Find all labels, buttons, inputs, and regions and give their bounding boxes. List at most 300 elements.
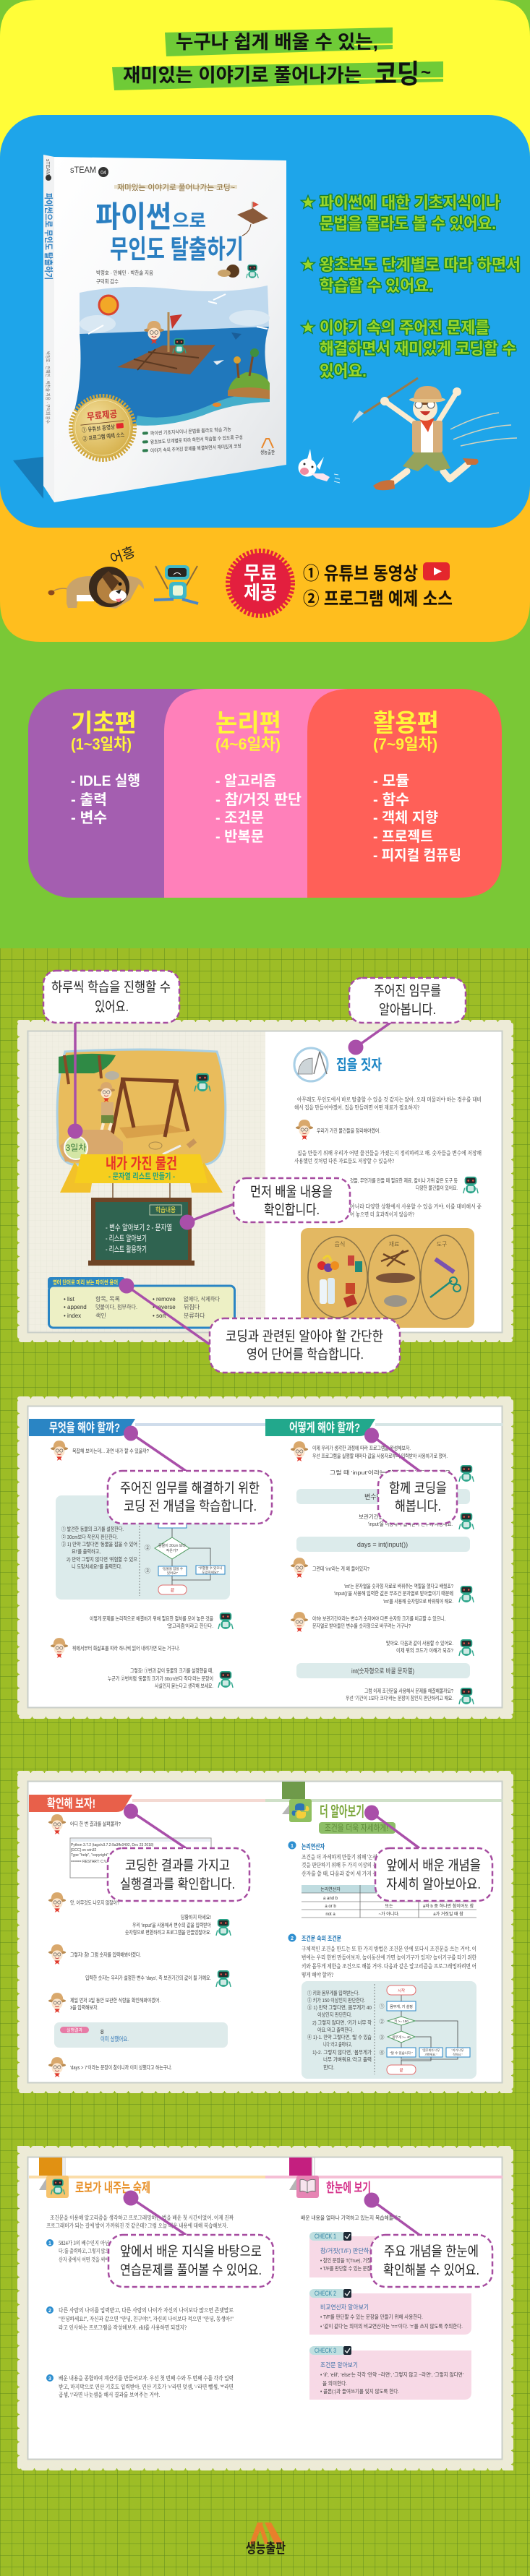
cover bullets — [142, 426, 243, 455]
nested conditions section: 2 — [291, 1936, 294, 1941]
cover illustration: sea and raft — [74, 285, 270, 426]
heading: at a glance: 한눈에 보기 — [326, 2181, 371, 2195]
homework text: 조건문을 이용해 알고리즘을 생각하고 프로그래밍하는 법을 배운 첫 시간이었어. 이제 진짜 — [50, 2214, 234, 2221]
flowchart panel: ③ — [379, 2035, 385, 2040]
flowchart panel: ① 발견한 동물의 크기를 설정한다. — [61, 1525, 124, 1532]
check card 1: • 참인 문장을 T(True), 거짓 — [320, 2257, 371, 2264]
callout: mission: 알아봅니다. — [379, 1002, 436, 1018]
illustration: item classification: 음식 — [335, 1241, 345, 1248]
flowchart panel: 한다. — [323, 2064, 335, 2071]
right dialog: int(숫자형으로 바꿀 문자열) — [351, 1667, 414, 1675]
nested conditions section — [288, 1934, 476, 2079]
check card 3: 을 의미한다. — [322, 2379, 347, 2387]
feature 1: 문법을 몰라도 볼 수 있어요. — [320, 215, 496, 233]
icon: python logo — [292, 1803, 309, 1819]
callout: concepts before coding: 코딩 전 개념을 학습합니다. — [124, 1498, 257, 1514]
callout: code together — [364, 1428, 457, 1524]
steam logo: sTEAM — [70, 165, 96, 175]
operators table: a and b — [323, 1897, 338, 1901]
flowchart panel: ② 30cm보다 작은지 판단한다. — [61, 1533, 118, 1540]
exercise 1 — [46, 2239, 109, 2263]
right dialog: 이제 우리가 생각한 과정에 따라 프로그램을 완성해보자. — [312, 1444, 411, 1451]
flowchart panel: 2) 만약 그렇지 않다면 '위험할 수 있으 — [67, 1555, 137, 1563]
callout: concepts in detail: 자세히 알아보아요. — [386, 1876, 481, 1892]
chalkboard: - 변수 알아보기 2 - 문자열 — [106, 1222, 172, 1232]
feature 2: 왕초보도 단계별로 따라 하면서 — [320, 256, 521, 274]
right dialog: 우선 '기간이 1보다 크다'라는 문장이 참인지 판단하려고 해요. — [346, 1694, 453, 1701]
logical operators section: 산자를 쓸 때, 다음과 같이 세 가지 중 — [302, 1870, 377, 1877]
left dialog: 숫자형으로 변환하려고 프로그램을 만들었잖아요. — [125, 1928, 211, 1936]
character: running explorer — [352, 378, 517, 490]
column: logic — [164, 689, 347, 898]
callout: english words: 코딩과 관련된 알아야 할 간단한 — [226, 1328, 383, 1344]
flowchart panel: ③ — [145, 1568, 150, 1574]
feature 2: 학습할 수 있어요. — [320, 277, 433, 295]
check card 3: • 콜론(:)과 들여쓰기를 잊지 않도록 한다. — [320, 2387, 399, 2395]
illustration: item classification: 도구 — [437, 1241, 447, 1248]
text: example source: ② 프로그램 예제 소스 — [303, 589, 453, 609]
feature list — [301, 194, 521, 380]
callout: english words — [119, 1278, 400, 1373]
body text: 해서 집을 만들어야겠어. 집을 만들려면 어떤 재료가 필요하지? — [294, 1104, 419, 1111]
homework text — [46, 2214, 234, 2398]
exercise 3: 곱셈, '/'라면 나눗셈을 해서 결과를 보여주는 거야. — [59, 2391, 160, 2398]
right dialog: 'int'를 사용해 숫자형으로 바꿔줘야 해요. — [383, 1597, 453, 1605]
logical operators section: 것을 판단하기 위해 두 가지 이상의 문 — [302, 1861, 377, 1868]
gold seal: ① 유튜브 동영상 — [82, 423, 116, 434]
right dialog: 'input'을 이용해서 입력받아 변수에 저장해요. — [368, 1520, 453, 1527]
cover bullets: 이야기 속의 주어진 문제를 해결하면서 재미있게 코딩 — [150, 442, 242, 454]
flowchart panel: ③ 1) 만약 그렇다면, 몸무게가 40 — [307, 2004, 372, 2011]
column: applied: - 모듈 — [373, 773, 409, 789]
icon: open book — [300, 2179, 315, 2193]
exercise 3: 3 — [48, 2377, 51, 2382]
illustration: item classification — [301, 1228, 474, 1328]
callout: practice problems: 앞에서 배운 지식을 바탕으로 — [120, 2244, 262, 2259]
right dialog: days = int(input()) — [357, 1541, 408, 1548]
flowchart panel: ③ 1) 만약 그렇다면 '동물을 잡을 수 있어 — [61, 1540, 137, 1547]
body text: 어 놓으면 더 효과적이지 않을까? — [350, 1211, 414, 1218]
left dialog lower: 그렇죠! ①번과 같이 동물의 크기를 설정했을 때, — [130, 1667, 213, 1674]
body text: 아니라 다양한 상황에서 사용할 수 있을 거야. 이를 대비해서 종 — [350, 1203, 482, 1210]
badge: day 3 — [64, 1136, 87, 1159]
flowchart panel: "위험할 수 있으니 — [198, 1566, 223, 1571]
chalkboard: 학습내용 — [155, 1206, 176, 1214]
right dialog: 이제 위의 코드가 이해가 되죠? — [396, 1647, 453, 1654]
flowchart panel: 동물이 30cm 보다 — [158, 1543, 186, 1548]
publisher mark on cover — [260, 439, 275, 455]
right dialog: 아하! 보관기간이라는 변수가 숫자여야 다른 숫자와 크기를 비교할 수 있으니, — [312, 1615, 445, 1622]
column: applied: - 피지컬 컴퓨팅 — [373, 847, 461, 864]
exercise 1: 다.'를 출력하고, 그렇지 않으 — [59, 2247, 109, 2254]
flowchart panel: 가벼워요." — [424, 2052, 437, 2056]
column: basics: - 출력 — [71, 791, 107, 808]
flowchart panel: 요!'를 출력하고, — [72, 1547, 101, 1555]
right dialog: 그럴 때 'input'이라는 명령어를 사용하면 돼요. — [330, 1469, 453, 1476]
headline line 2: 코딩 — [375, 59, 419, 89]
body text: 아무래도 무인도에서 바로 탈출할 수 있을 것 같지는 않아. 오래 머물러야 하는 경우를 대비 — [297, 1096, 482, 1103]
column: applied: - 객체 지향 — [373, 810, 438, 826]
callout: concepts in detail: 앞에서 배운 개념을 — [386, 1858, 481, 1873]
column: logic: (4~6일차) — [215, 735, 281, 753]
left dialog: 제일 먼저 3일 동안 보관한 식량을 확인해봐야겠어. — [70, 1996, 161, 2004]
mini characters — [218, 265, 258, 278]
right dialog: 그런데 'int'라는 게 왜 들어있지? — [312, 1565, 369, 1572]
flowchart panel: ② — [379, 2019, 385, 2025]
check card 1: CHECK 1 — [315, 2233, 336, 2240]
heading: learn more: 더 알아보기 — [320, 1803, 364, 1820]
body text: 사용했던 것처럼 다른 자료들도 저장할 수 있을까? — [294, 1157, 394, 1164]
callout: concepts before coding — [108, 1425, 272, 1524]
right dialog: 보관기간을 — [359, 1513, 384, 1520]
check card 2: • '같이 같다'는 의미의 비교연산자는 '=='이다. '='를 쓰지 않도록 주의한다. — [320, 2322, 463, 2330]
left dialog: 앗, 아무것도 나오지 않잖아? — [70, 1899, 119, 1906]
cover tagline: 재미있는 이야기로 풀어나가는 코딩~ — [117, 183, 235, 192]
right dialog: 우선 프로그램을 실행할 때마다 값을 사용자로부터 입력받아 사용하기로 했어. — [312, 1452, 448, 1459]
vocabulary box: • append — [64, 1304, 87, 1310]
left dialog: 어디 한 번 결과를 살펴볼까? — [70, 1820, 121, 1827]
flowchart panel: ② — [145, 1545, 150, 1551]
column: basics: (1~3일차) — [71, 735, 132, 753]
page title: 집을 짓자 — [336, 1057, 382, 1073]
heading: what to do: 무엇을 해야 할까? — [49, 1421, 120, 1435]
logo: publisher: 생능출판 — [246, 2541, 286, 2556]
callout: what you'll learn: 먼저 배울 내용을 — [250, 1184, 333, 1200]
operators table: a가 거짓일 때 참 — [433, 1911, 463, 1917]
spine text — [43, 159, 54, 424]
exercise 3: 배운 내용을 종합하여 계산기를 만들어보자. 우선 첫 번째 수와 두 번째 수를 각각 입력 — [59, 2374, 234, 2382]
icon: lion — [48, 544, 144, 609]
heading: what to do — [29, 1419, 265, 1436]
background: graph paper section — [0, 948, 530, 2576]
heading: robot homework — [29, 2158, 265, 2198]
spine text: 파이썬으로 무인도 탈출하기 — [43, 193, 54, 280]
exercise 2: "안녕하세요!", 자신과 같으면 "안녕, 친구야!", 자신의 나이보다 적으면 "안녕, 동생아!" — [59, 2315, 234, 2322]
exercise 3 — [46, 2374, 234, 2398]
body text: 것들, 무언가를 만들 때 필요한 재료, 칼이나 가위 같은 도구 등 — [350, 1177, 458, 1184]
callout: practice problems: 연습문제를 풀어볼 수 있어요. — [120, 2262, 262, 2278]
exercise 2: 2 — [48, 2309, 51, 2314]
text: roar: 어흥 — [108, 544, 137, 567]
check card 2 — [309, 2289, 471, 2335]
panel: blue book hero — [0, 115, 530, 528]
exercise 2: 다른 사람의 나이를 입력받고, 다른 사람의 나이가 자신의 나이보다 많으면 존댓말로 — [59, 2306, 234, 2314]
body text — [294, 1096, 482, 1218]
nested conditions section: 떻게 해야 할까? — [302, 1971, 333, 1978]
nested conditions section: 구체적인 조건을 만드는 또 한 가지 방법은 조건문 안에 또다시 조건문을 쓰는 거야. 이 — [302, 1945, 476, 1952]
headline line 2 — [112, 59, 443, 90]
vocabulary box: • remove — [153, 1296, 176, 1302]
operators table: 또는 — [385, 1904, 393, 1909]
callout: concepts before coding: 주어진 임무를 해결하기 위한 — [120, 1480, 260, 1496]
cover title: 파이썬 — [95, 200, 171, 233]
badge: day 3: 3일차 — [66, 1143, 86, 1153]
heading: how to do: 어떻게 해야 할까? — [289, 1421, 360, 1435]
callout: learn daily: 하루씩 학습을 진행할 수 — [51, 979, 171, 995]
heading: learn more — [265, 1782, 503, 1834]
flowchart panel: 끝 — [171, 1588, 175, 1593]
operators table: a와 b 중 하나만 참이어도 참 — [423, 1903, 474, 1909]
flowchart panel: ② 키가 150 이상인지 판단한다. — [307, 1996, 365, 2004]
check card 1 — [309, 2232, 471, 2277]
heading: check result — [29, 1795, 265, 1812]
left dialog: [GCC] on win32 — [71, 1848, 97, 1852]
vocabulary box: 덧붙이다, 첨부하다. — [95, 1303, 137, 1310]
callout: learn daily — [43, 971, 179, 1139]
cover title: 무인도 탈출하기 — [110, 234, 244, 264]
body text: 우리가 가진 물건들을 정리해야겠어. — [317, 1127, 380, 1134]
icon: compass and protractor — [294, 1048, 328, 1081]
cover title: 으로 — [172, 211, 206, 231]
spine text: 박정호 · 안혜민 · 박찬솔 지음 · 구덕회 감수 — [45, 351, 51, 424]
callout: practice problems — [108, 2190, 273, 2287]
heading: check result: 확인해 보자! — [47, 1797, 95, 1811]
flowchart panel: "탈 수 있습니다." — [390, 2051, 413, 2056]
callout: key concepts — [364, 2193, 492, 2287]
exercise 2: 라고 인사하는 프로그램을 작성해보자. elif를 사용하면 되겠지? — [59, 2324, 187, 2331]
vocabulary box: • reverse — [153, 1304, 176, 1310]
gold seal: ② 프로그램 예제 소스 — [82, 431, 125, 442]
callout: learn daily: 있어요. — [95, 999, 129, 1015]
left dialog: 8 — [101, 2029, 104, 2035]
right dialog: 그럼 이제 조건문을 사용해서 문제를 해결해볼까요? — [364, 1687, 453, 1694]
vocabulary box: 없애다, 삭제하다 — [184, 1295, 221, 1302]
exercise 1: 1 — [48, 2241, 51, 2246]
callout: concepts in detail — [364, 1806, 492, 1901]
operators table — [302, 1885, 476, 1918]
flowchart panel: 작아요." — [453, 2052, 463, 2056]
feature 3: 이야기 속의 주어진 문제를 — [320, 319, 490, 337]
body text: 다양한 물건들이 있어요. — [416, 1184, 458, 1191]
panel: page sample 4 — [20, 2148, 511, 2468]
callout: mission — [349, 978, 466, 1055]
cover title — [95, 200, 244, 264]
callout: key concepts: 확인해볼 수 있어요. — [383, 2262, 479, 2278]
flowchart panel: 2) 그렇지 않다면, '키가 너무 작 — [312, 2019, 372, 2026]
icon: youtube play — [423, 562, 450, 580]
text: youtube videos: ① 유튜브 동영상 — [303, 564, 418, 584]
left dialog top — [51, 1441, 149, 1461]
logical operators section: 논리연산자 — [302, 1842, 325, 1850]
panel: course parts — [28, 689, 502, 898]
left dialog lower: 이렇게 문제를 논리적으로 해결하기 위해 필요한 절차를 모아 놓은 것을 — [90, 1615, 213, 1622]
operators table: 논리연산자 — [320, 1886, 341, 1892]
left dialog: 우리 'input'을 사용해서 변수의 값을 입력받아 — [132, 1921, 211, 1928]
exercise 2 — [46, 2306, 234, 2331]
ribbon heading: - 문자열 리스트 만들기 - — [108, 1171, 175, 1181]
left dialog: 이미 상했어요. — [101, 2035, 129, 2043]
vocabulary box: 뒤집다 — [184, 1303, 200, 1310]
illustration: beach scene — [57, 1049, 226, 1164]
column: logic: - 알고리즘 — [215, 773, 276, 789]
column: applied: 활용편 — [373, 710, 439, 737]
flowchart panel: "동물을 잡을 수 — [162, 1566, 183, 1571]
heading: at a glance — [265, 2158, 503, 2198]
column: logic: - 참/거짓 판단 — [215, 791, 302, 808]
flowchart panel: ① 키와 몸무게를 입력받는다. — [307, 1989, 359, 1996]
left dialog: 실행결과 — [67, 2027, 83, 2033]
check card 3: • 'if', 'elif', 'else'는 각각 '만약 ~라면', '그렇지 않고 ~라면', '그렇지 않다면' — [320, 2371, 463, 2378]
flowchart panel: 몸무게, 키 설정 — [390, 2004, 413, 2009]
exercise 1: 5824가 3의 배수인지 아닌 — [59, 2239, 109, 2246]
flowchart panel: 니다.'라고 출력하고, — [323, 2040, 352, 2048]
logical operators section: 1 — [291, 1844, 294, 1849]
feature 3: 있어요. — [320, 362, 367, 380]
book: cover mockup — [13, 155, 286, 502]
left dialog: 당황하지 마세요! — [181, 1913, 211, 1920]
callout: check results: 코딩한 결과를 가지고 — [125, 1858, 230, 1873]
callout: what you'll learn — [179, 1178, 350, 1230]
vocabulary box: 색인 — [95, 1312, 106, 1319]
flowchart panel: 도망치세요!" — [202, 1570, 219, 1575]
badge: free offer: 무료 — [244, 562, 277, 584]
logo: publisher — [246, 2523, 286, 2556]
icon: robot waving — [154, 565, 198, 604]
feature 3: 해결하면서 재미있게 코딩할 수 — [320, 340, 516, 358]
body text: 집을 만들기 위해 우리가 어떤 물건들을 가졌는지 정리하려고 해. 숫자들을 변수에 저장해 — [297, 1149, 482, 1156]
cover bullets: 왕초보도 단계별로 따라 하면서 학습할 수 있도록 구성 — [150, 434, 243, 445]
callout: check results — [108, 1804, 249, 1901]
right dialog: 문자열로 받아들인 변수를 숫자형으로 바꾸려는 거구나? — [312, 1622, 411, 1629]
right dialog — [291, 1441, 474, 1704]
feature 1: 파이썬에 대한 기초지식이나 — [320, 194, 500, 212]
authors — [96, 269, 153, 285]
ribbon heading: 내가 가진 물건 — [106, 1156, 177, 1172]
column: applied — [307, 689, 502, 898]
mini raft — [237, 202, 268, 236]
left dialog lower — [51, 1613, 233, 1689]
operators table: a or b — [325, 1905, 336, 1909]
steam logo: 04 — [101, 171, 106, 176]
flowchart panel: 작은가? — [166, 1548, 179, 1553]
left dialog lower: 위에서부터 화살표를 따라 하나씩 읽어 내려가면 되는 거구나. — [72, 1644, 180, 1652]
authors: 구덕회 감수 — [96, 278, 119, 285]
flowchart panel: 너무 가벼워요.'라고 출력 — [323, 2056, 372, 2063]
panel: page sample 2 — [20, 1399, 511, 1717]
headline line 1 — [165, 27, 393, 56]
left dialog: 'days > 7'이라는 문장이 참이니까 이미 상했다고 하는구나. — [70, 2064, 172, 2071]
vocabulary box: 항목, 목록 — [95, 1296, 120, 1302]
flowchart panel: 몸무게 >= 40 — [392, 2035, 411, 2040]
left dialog: ===== RESTART: C:\Users ===== — [71, 1860, 127, 1864]
logical operators section: 조건을 더 자세하게 만들기 위해 '논리 — [302, 1853, 377, 1860]
left dialog: 그렇지! 참! 그럼 숫자를 입력해봐야겠다. — [70, 1951, 141, 1958]
character: rabbit — [298, 449, 340, 483]
column: applied: - 프로젝트 — [373, 828, 433, 845]
left dialog lower: '알고리즘'이라고 한단다. — [167, 1622, 213, 1629]
chalkboard: - 리스트 알아보기 — [106, 1233, 147, 1243]
spine text: sTEAM — [45, 159, 50, 176]
callout: code together: 해봅니다. — [395, 1498, 441, 1514]
vocabulary box: 분류하다 — [184, 1312, 205, 1319]
flowchart panel: 키 >= 150 — [394, 2019, 409, 2024]
flowchart panel: 니 도망치세요!'를 출력한다. — [72, 1563, 122, 1570]
heading: how to do — [265, 1419, 503, 1436]
chalkboard — [88, 1183, 195, 1266]
left dialog — [48, 1814, 231, 2077]
left dialog lower: 누군가 ②번처럼 '동물의 크기가 30cm보다 작다'라는 문장이 — [108, 1675, 213, 1682]
vocabulary box: • list — [64, 1296, 75, 1302]
flowchart panel: "키가 너무 — [451, 2048, 464, 2052]
headline line 1: 누구나 쉽게 배울 수 있는, — [176, 31, 378, 53]
flowchart panel — [56, 1495, 230, 1600]
flowchart panel: ④ 1)-1. 만약 그렇다면, '탈 수 있습 — [307, 2033, 372, 2040]
right dialog: 'int'는 문자열을 숫자형 자료로 바꿔주는 역할을 했다고 배웠죠? — [344, 1582, 453, 1589]
left dialog: Python 3.7.2 (tags/v3.7.2:9a3ffc0492, Dec 23 2018) — [71, 1843, 154, 1847]
check card 2: CHECK 2 — [315, 2290, 336, 2297]
flowchart panel: 1)-2. 그렇지 않다면, '몸무게가 — [312, 2048, 372, 2056]
check card 1: • T/F를 판단할 수 있는 문장 — [320, 2264, 371, 2272]
gold seal — [68, 393, 137, 463]
flowchart panel: 끝 — [399, 2068, 403, 2073]
flowchart panel: 아요.'라고 출력한다. — [317, 2026, 354, 2033]
authors: 박정호 · 안혜민 · 박찬솔 지음 — [96, 269, 153, 276]
panel: page sample 3 — [20, 1773, 511, 2091]
column: basics: - 변수 — [71, 810, 107, 826]
check card 1: 참/거짓(T/F) 판단하기 — [320, 2247, 375, 2254]
check card 3: 조건문 알아보기 — [320, 2361, 358, 2369]
vocabulary box — [48, 1277, 234, 1328]
headline line 2: ~ — [421, 63, 431, 82]
column: basics: 기초편 — [71, 710, 137, 737]
homework text: 프로그래머가 되는 길에 발이 가까워진 것 같은데? 그럼 오늘 배운 내용에 대해 복습해보자. — [46, 2222, 228, 2229]
flowchart panel: 이상인지 판단한다. — [317, 2011, 352, 2018]
panel: yellow header — [0, 0, 530, 361]
operators table: ~가 아니다. — [379, 1911, 400, 1917]
illustration: item classification: 재료 — [389, 1241, 399, 1248]
flowchart panel: 있어요!" — [167, 1571, 179, 1576]
nested conditions section: 번에는 우리 한번 만들어보자. 놀이동산에 가면 놀이기구가 있지? 놀이기구를 타기 위한 — [302, 1954, 476, 1961]
callout: mission: 주어진 임무를 — [374, 983, 441, 999]
column: logic: - 반복문 — [215, 828, 264, 845]
badge: free offer: 제공 — [244, 582, 277, 604]
right dialog: 변수명 = input() — [364, 1493, 409, 1500]
publisher mark on cover: 생능출판 — [260, 449, 275, 455]
check card 3: CHECK 3 — [315, 2347, 336, 2354]
steam logo — [70, 165, 108, 177]
callout: english words: 영어 단어를 학습합니다. — [247, 1347, 364, 1362]
check card 2: 비교연산자 알아보기 — [320, 2304, 369, 2311]
panel: page sample 1 — [20, 1022, 511, 1340]
flowchart panel: "몸무게가 너무 — [422, 2048, 440, 2052]
ribbon heading — [60, 1154, 223, 1193]
feature 1 — [301, 194, 500, 233]
callout: code together: 함께 코딩을 — [389, 1480, 447, 1496]
vocabulary box: 영어 단어로 미리 보는 파이썬 용어 — [53, 1279, 118, 1286]
feature 2 — [301, 256, 521, 295]
left dialog lower: 사실인지 묻는다고 생각해 보세요. — [155, 1682, 213, 1689]
gold seal: 무료제공 — [86, 408, 118, 422]
feature 3 — [301, 319, 516, 380]
callout: what you'll learn: 확인합니다. — [264, 1202, 320, 1218]
exercise 3: 받고, 마지막으로 연산 기호도 입력받아. 연산 기호가 '+'라면 덧셈, '-'라면 뺄셈, '*'라면 — [59, 2383, 234, 2390]
callout: key concepts: 주요 개념을 한눈에 — [384, 2244, 479, 2259]
operators table: not a — [325, 1912, 335, 1917]
column: basics — [28, 689, 245, 898]
headline line 2: 재미있는 이야기로 풀어나가는 — [123, 64, 362, 86]
cover bullets: 파이썬 기초지식이나 문법을 몰라도 학습 가능 — [150, 426, 231, 437]
check card 3 — [309, 2346, 471, 2400]
left dialog: 입력한 숫자는 우리가 설정한 변수 'days', 즉 보관기간의 값이 될 거예요. — [85, 1974, 211, 1981]
exercise 1: 산자 중에서 어떤 것을 써야 — [59, 2256, 109, 2263]
right dialog: 맞아요. 다음과 같이 사용할 수 있어요. — [386, 1639, 453, 1647]
flowchart panel: ④ — [379, 2050, 385, 2056]
chalkboard: - 리스트 활용하기 — [106, 1244, 147, 1254]
column: applied: (7~9일차) — [373, 735, 437, 753]
left dialog: 3을 입력해보자. — [70, 2004, 98, 2011]
column: applied: - 함수 — [373, 791, 409, 808]
callout: check results: 실행결과를 확인합니다. — [120, 1876, 235, 1892]
